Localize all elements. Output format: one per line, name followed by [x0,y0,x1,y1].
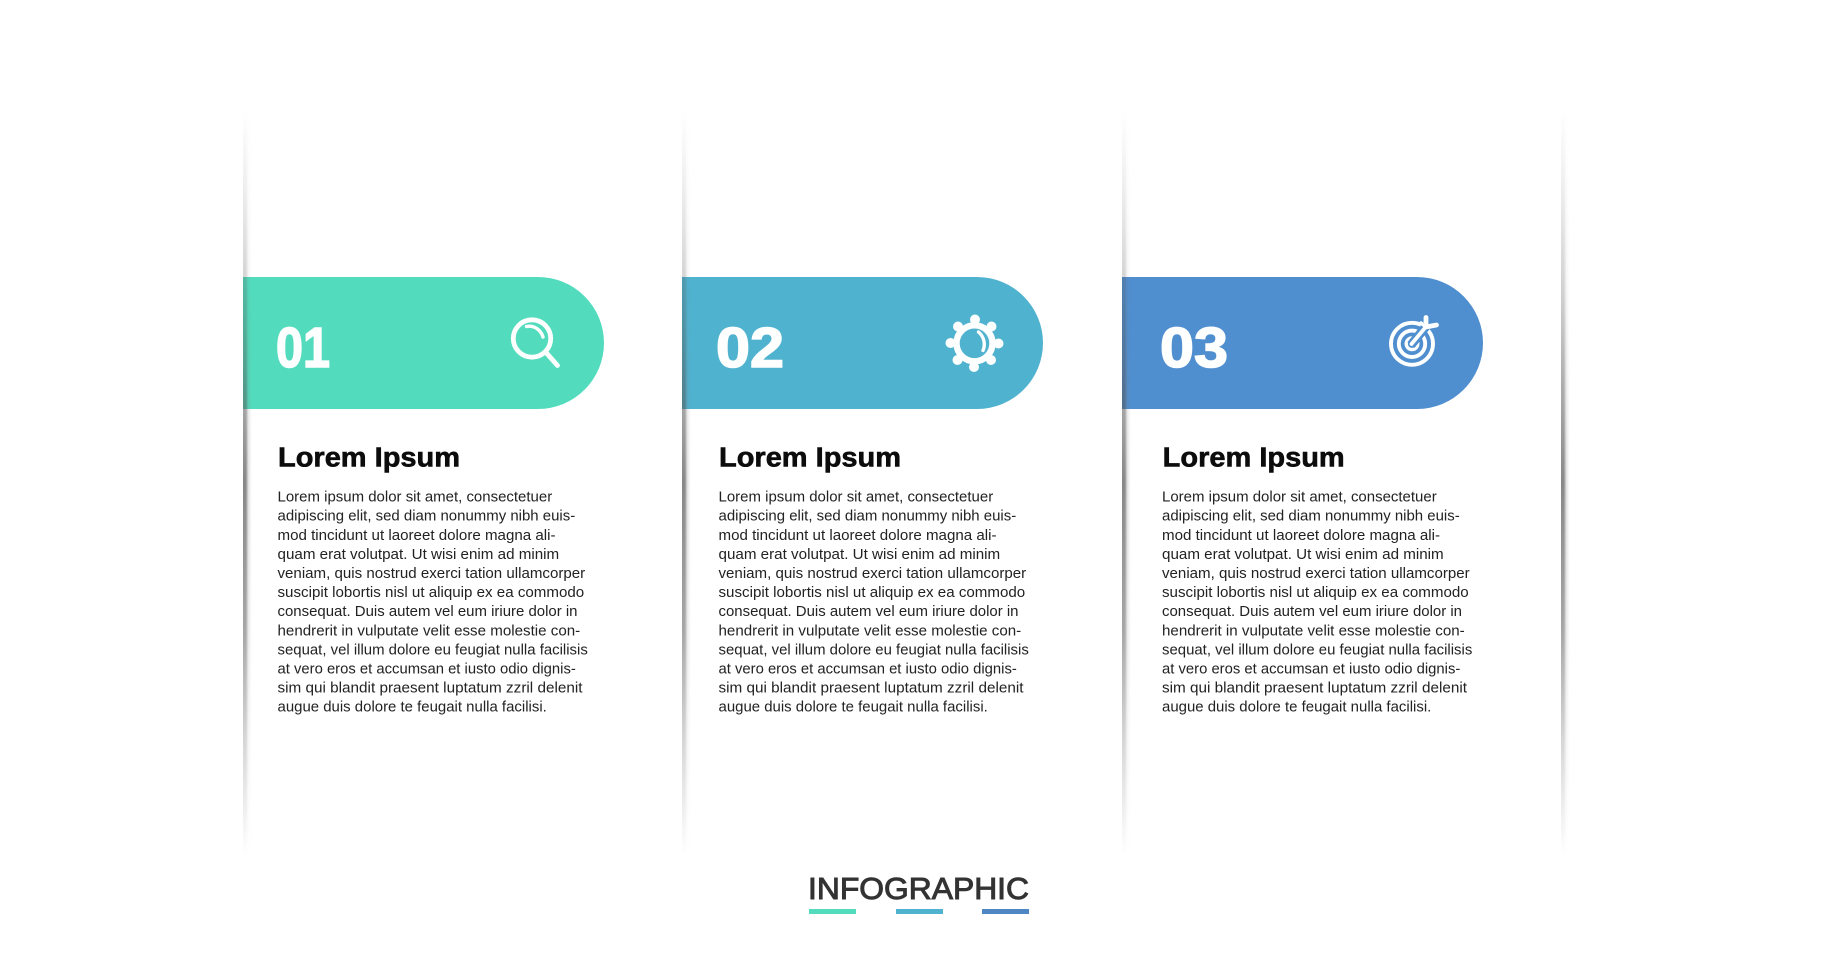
body text: step 02: consequat. Duis autem vel eum iriure dolor in [718,603,1018,620]
heading: step 01: Lorem Ipsum [278,442,460,472]
body text: step 02: sequat, vel illum dolore eu feugiat nulla facilisis [718,641,1029,658]
bar: teal [809,909,856,914]
bar: light blue [896,909,943,914]
body text: step 01: sequat, vel illum dolore eu feugiat nulla facilisis [278,641,588,658]
body text: step 01: suscipit lobortis nisl ut aliquip ex ea commodo [278,584,584,601]
body text: step 03: augue duis dolore te feugait nulla facilisi. [1162,699,1431,716]
body text: step 03: veniam, quis nostrud exerci tation ullamcorper [1162,565,1470,582]
body text: step 03: suscipit lobortis nisl ut aliquip ex ea commodo [1162,584,1469,601]
body text: step 02: augue duis dolore te feugait nulla facilisi. [718,699,988,716]
body text: step 02: suscipit lobortis nisl ut aliquip ex ea commodo [718,584,1025,601]
panel: step 03 [1122,277,1483,716]
banner: step 03 [1122,277,1483,409]
body text: step 03: sim qui blandit praesent luptatum zzril delenit [1162,680,1468,697]
body text: step 02: sim qui blandit praesent luptatum zzril delenit [718,680,1024,697]
heading: step 03: Lorem Ipsum [1163,442,1345,472]
banner: step 01 [243,277,604,409]
title: INFOGRAPHIC: INFOGRAPHIC [808,871,1029,906]
banner: step 02 [682,277,1043,409]
body text: step 03: quam erat volutpat. Ut wisi enim ad minim [1162,546,1444,563]
body text: step 01: Lorem ipsum dolor sit amet, consectetuer [278,489,552,506]
body text: step 01 [278,489,588,716]
body text: step 03: Lorem ipsum dolor sit amet, consectetuer [1162,489,1437,506]
body text: step 02: Lorem ipsum dolor sit amet, consectetuer [718,489,993,506]
icon: gear [946,314,1004,372]
heading: step 02: Lorem Ipsum [719,442,901,472]
body text: step 01: at vero eros et accumsan et iusto odio dignis- [278,660,576,678]
body text: step 02: hendrerit in vulputate velit esse molestie con- [718,622,1021,639]
number: 02: 02 [716,316,784,380]
body text: step 03: adipiscing elit, sed diam nonummy nibh euis- [1162,508,1460,525]
footer title with colour bars [808,871,1029,914]
body text: step 01: hendrerit in vulputate velit esse molestie con- [278,622,580,639]
body text: step 01: adipiscing elit, sed diam nonummy nibh euis- [278,508,575,525]
body text: step 03: mod tincidunt ut laoreet dolore magna ali- [1162,527,1440,544]
body text: step 03: consequat. Duis autem vel eum iriure dolor in [1162,603,1462,620]
body text: step 03 [1162,489,1472,716]
body text: step 02: at vero eros et accumsan et iusto odio dignis- [718,660,1017,678]
body text: step 01: mod tincidunt ut laoreet dolore magna ali- [278,527,556,544]
body text: step 01: augue duis dolore te feugait nulla facilisi. [278,699,547,716]
body text: step 03: at vero eros et accumsan et iusto odio dignis- [1162,660,1460,678]
number: 03: 03 [1160,316,1228,380]
body text: step 02: adipiscing elit, sed diam nonummy nibh euis- [718,508,1016,525]
body text: step 03: sequat, vel illum dolore eu feugiat nulla facilisis [1162,641,1472,658]
bar: blue [982,909,1029,914]
body text: step 02: mod tincidunt ut laoreet dolore magna ali- [718,527,996,544]
body text: step 02 [718,489,1029,716]
icon: target with arrow [1391,318,1436,365]
body text: step 01: sim qui blandit praesent luptatum zzril delenit [278,680,583,697]
body text: step 02: quam erat volutpat. Ut wisi enim ad minim [718,546,1000,563]
number: 01: 01 [276,316,330,380]
icon: magnifying glass [513,320,558,366]
body text: step 01: consequat. Duis autem vel eum iriure dolor in [278,603,578,620]
body text: step 02: veniam, quis nostrud exerci tation ullamcorper [718,565,1026,582]
body text: step 01: quam erat volutpat. Ut wisi enim ad minim [278,546,559,563]
panel: step 01 [243,277,604,716]
body text: step 01: veniam, quis nostrud exerci tation ullamcorper [278,565,585,582]
body text: step 03: hendrerit in vulputate velit esse molestie con- [1162,622,1465,639]
panel: step 02 [682,277,1043,716]
